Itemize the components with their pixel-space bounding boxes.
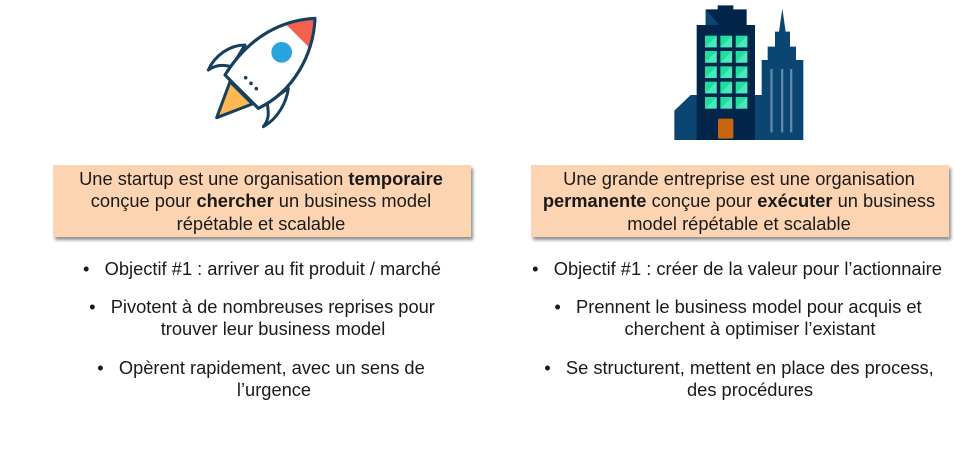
- large company definition text: permanente conçue pour exécuter un business: [543, 190, 935, 211]
- large company bullet list: • Se structurent, mettent en place des process,: [544, 357, 934, 378]
- startup definition text: conçue pour chercher un business model: [91, 190, 431, 211]
- large company bullet list: • Prennent le business model pour acquis et: [554, 296, 922, 317]
- startup bullet list: trouver leur business model: [161, 318, 385, 339]
- large company definition text: [543, 168, 935, 234]
- large company bullet list: des procédures: [687, 379, 813, 400]
- large company definition text: model répétable et scalable: [627, 213, 851, 234]
- startup definition text: Une startup est une organisation temporaire: [79, 168, 443, 189]
- icon: rocket: [206, 16, 316, 128]
- startup bullet list: • Pivotent à de nombreuses reprises pour: [89, 296, 435, 317]
- large company bullet list: • Objectif #1 : créer de la valeur pour l’actionnaire: [532, 258, 942, 279]
- startup bullet list: • Objectif #1 : arriver au fit produit / marché: [83, 258, 441, 279]
- large company bullet list: cherchent à optimiser l’existant: [625, 318, 875, 339]
- startup definition text: répétable et scalable: [177, 213, 345, 234]
- panel: startup definition: [53, 165, 471, 237]
- panel: large company definition: [531, 165, 949, 237]
- startup bullet list: • Opèrent rapidement, avec un sens de: [97, 357, 425, 378]
- icon: office buildings: [674, 5, 804, 140]
- large company definition text: Une grande entreprise est une organisation: [563, 168, 915, 189]
- startup bullet list: l’urgence: [237, 379, 311, 400]
- startup definition text: [79, 168, 443, 234]
